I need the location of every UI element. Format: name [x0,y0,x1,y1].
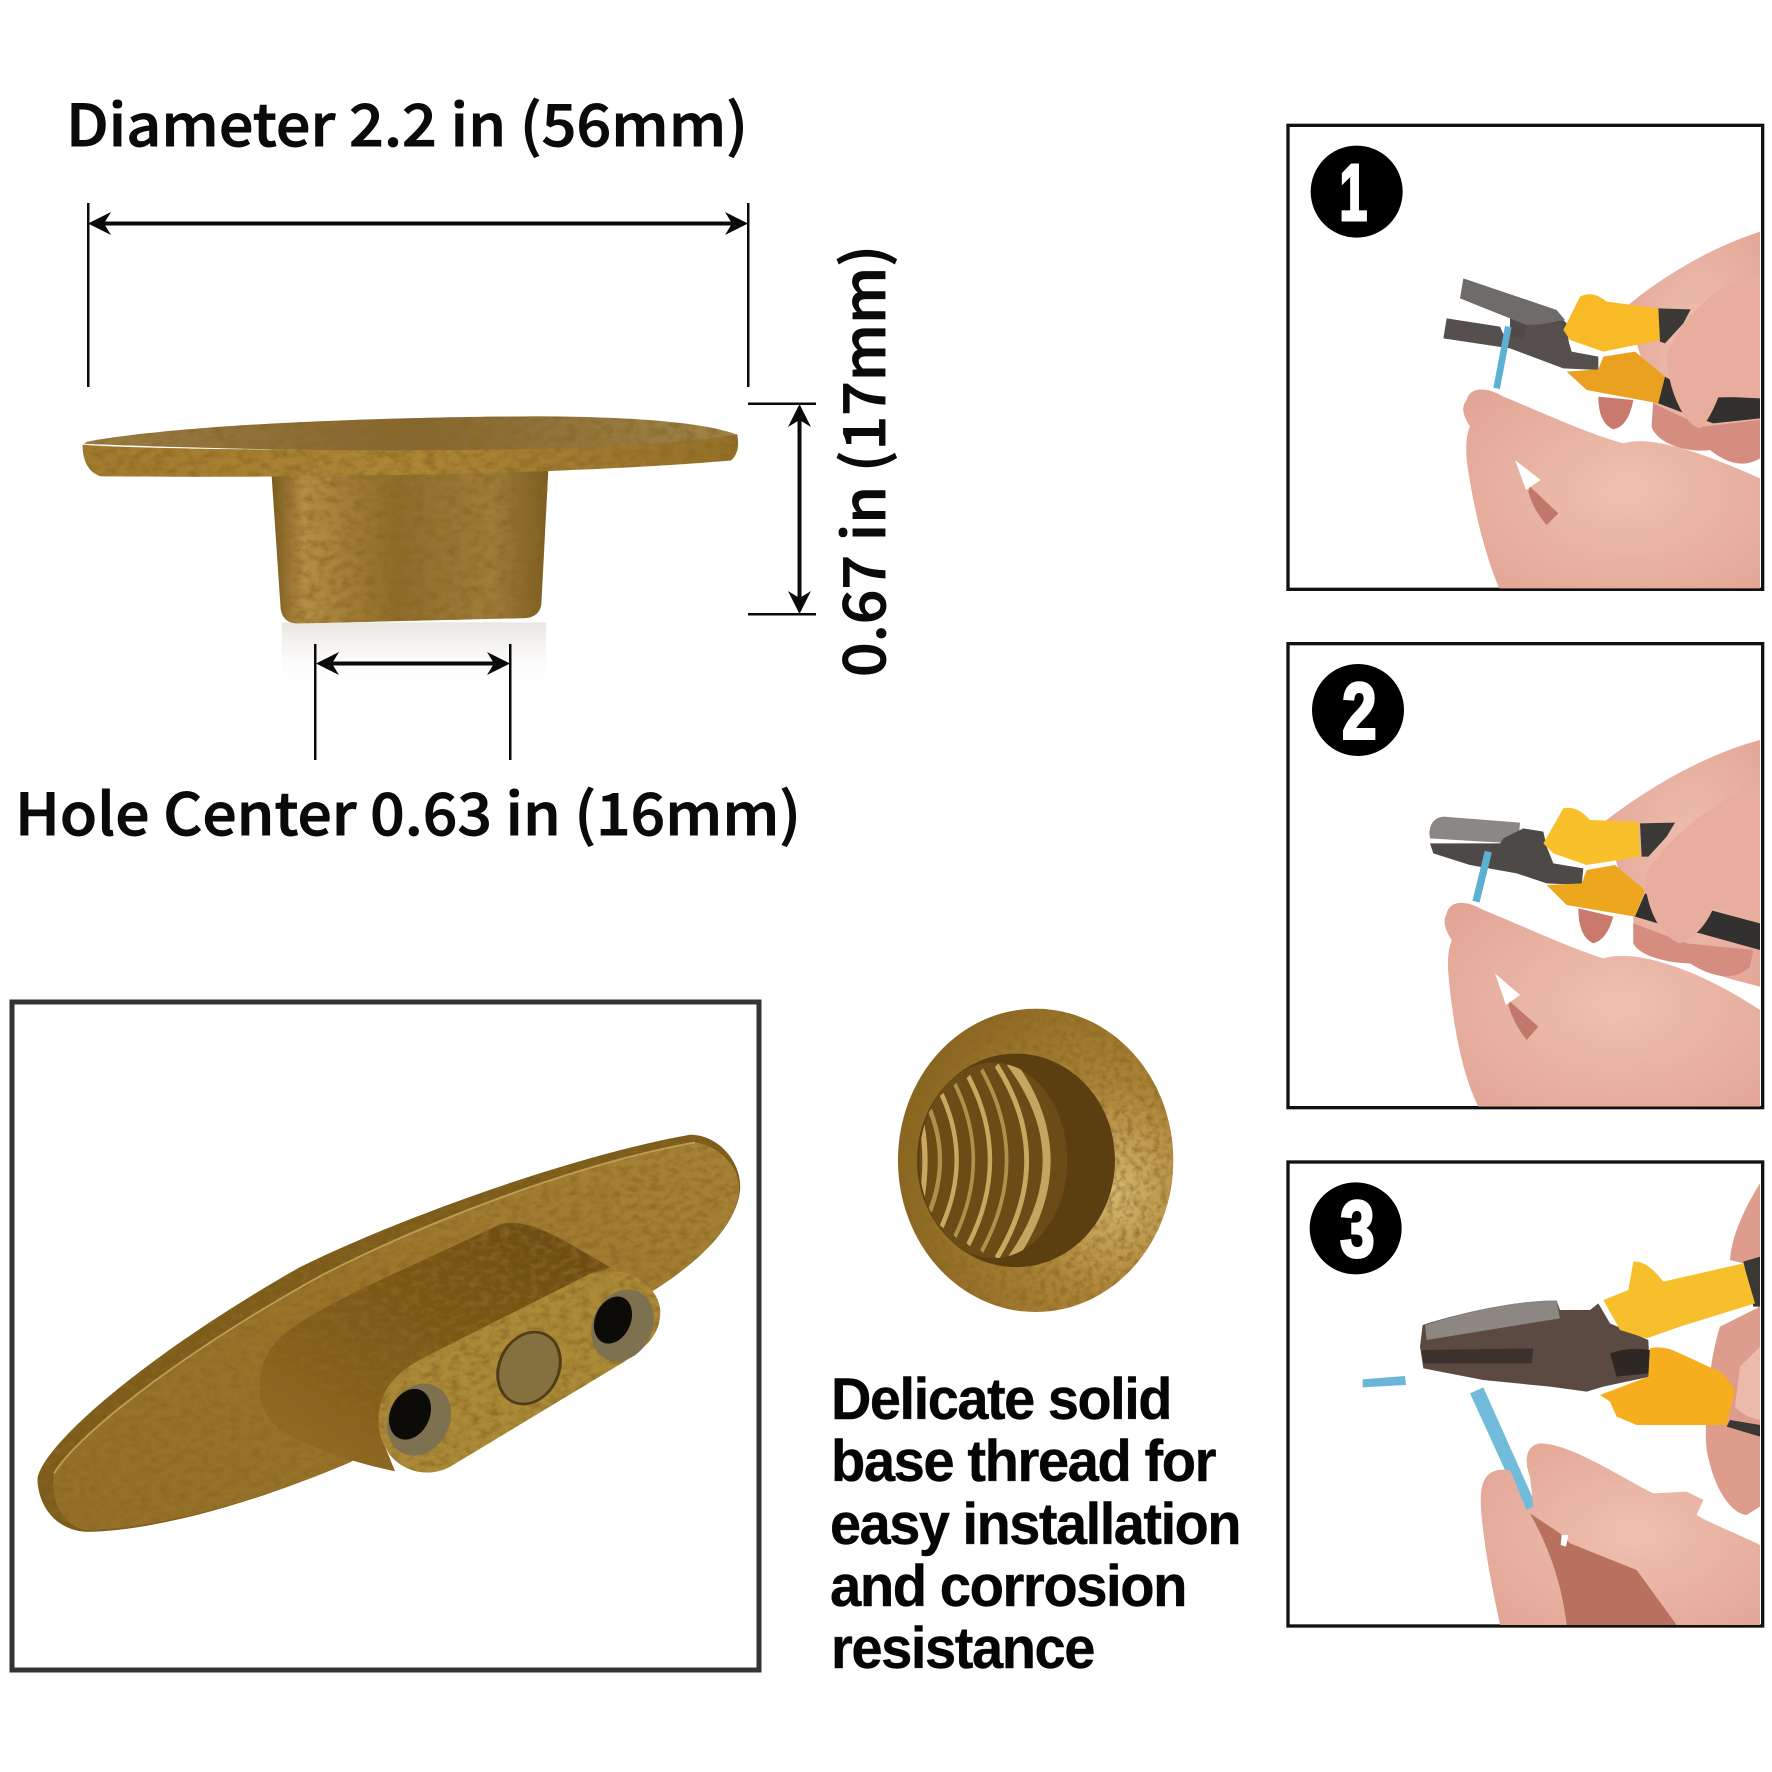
illustration: hands and pliers step 2 [1429,740,1760,1107]
text block: thread description: Delicate solid [831,1367,1171,1432]
hole: threaded left [377,1376,461,1463]
illustration: hands and pliers step 3 [1363,1183,1760,1625]
arrow: height dimension [748,402,816,616]
arrow: hole center dimension [314,644,512,760]
arrow: diameter dimension [87,203,750,387]
icon: number 3 [1310,1182,1402,1274]
product photo: thread detail [898,1009,1173,1312]
product photo: knob rear [38,1135,740,1532]
text block: thread description [830,1367,1240,1681]
text block: thread description: easy installation [830,1492,1240,1557]
product photo: knob side view [83,416,738,691]
icon: number 2 [1312,664,1404,756]
text block: thread description: resistance [831,1616,1094,1681]
icon: number 2: 2 [1342,666,1377,755]
label: height: 0.67 in (17mm) [818,245,902,677]
panel: step 3 [1288,1162,1763,1626]
hole: threaded right [581,1282,664,1369]
text block: thread description: and corrosion [830,1554,1186,1619]
panel: knob rear view [12,1002,759,1670]
hole: solid center [488,1325,570,1411]
icon: number 1: 1 [1339,148,1367,237]
panel: step 2 [1288,644,1763,1108]
heading: diameter: Diameter 2.2 in (56mm) [66,79,748,163]
panel: step 1 [1288,125,1763,590]
illustration: hands and pliers step 1 [1443,232,1760,590]
rim highlight [54,1142,695,1473]
label: hole center: Hole Center 0.63 in (16mm) [15,768,801,852]
icon: number 1 [1311,146,1403,238]
icon: number 3: 3 [1340,1185,1375,1274]
text block: thread description: base thread for [831,1429,1216,1494]
